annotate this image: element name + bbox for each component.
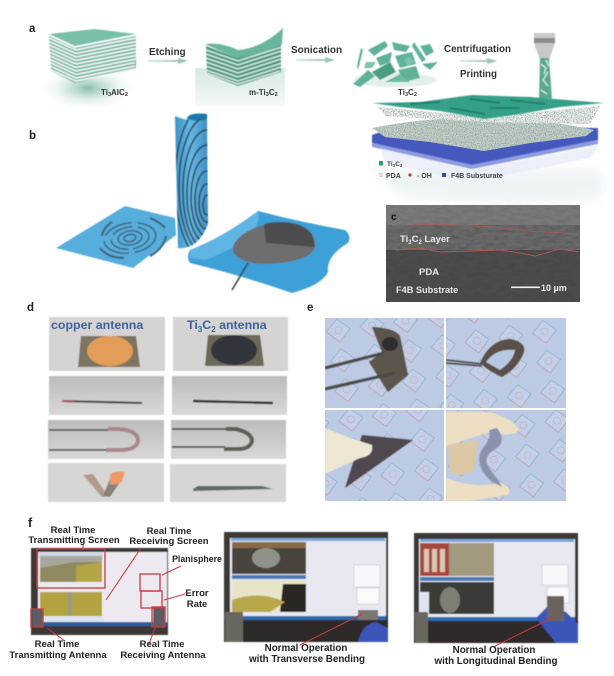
label Ti3C2 Layer: Layer [422, 234, 450, 245]
panel label c: c [391, 212, 397, 223]
legend item Ti3C2 [379, 161, 403, 168]
label Ti3C2 Layer: 3 [408, 240, 412, 246]
callout Real Time Receiving Screen: Real Time [147, 526, 191, 537]
label Ti3AlC2: 3 [108, 92, 111, 98]
red pointer to bent antenna [493, 618, 552, 647]
callout Error Rate: Rate [187, 599, 207, 610]
callout Real Time Receiving Antenna: Receiving Antenna [120, 650, 206, 661]
right sheet with solid antenna [188, 211, 349, 293]
rolled sheet with spiral antenna [174, 112, 209, 249]
legend item OH: - OH [417, 173, 432, 180]
legend item Ti3C2: Ti [387, 161, 393, 168]
label m-Ti3C2: 3 [266, 92, 269, 98]
label Ti3C2: 3 [405, 92, 408, 98]
panel c: SEM cross-section [386, 205, 580, 302]
callout Error Rate: Error [185, 588, 209, 599]
icon: m-Ti3C2 accordion stack [195, 28, 285, 106]
callout Real Time Receiving Screen: Receiving Screen [129, 536, 209, 547]
process label Printing: Printing [460, 69, 497, 80]
legend item Ti3C2: 2 [400, 163, 403, 168]
label m-Ti3C2: C [269, 88, 275, 97]
callout Real Time Transmitting Screen: Transmitting Screen [28, 535, 120, 546]
caption Normal Operation with Longitudinal Bending: with Longitudinal Bending [434, 656, 558, 667]
process label Centrifugation: Centrifugation [444, 44, 511, 55]
panel a: MXene synthesis process [29, 23, 604, 203]
Ti3C2 layer [372, 95, 604, 119]
label Ti3AlC2: 2 [125, 92, 128, 98]
label Ti3C2 Layer: 2 [418, 240, 422, 246]
heading Ti3C2 antenna: 2 [211, 325, 216, 334]
panel label a: a [29, 23, 36, 35]
callout Real Time Receiving Antenna: Real Time [140, 639, 184, 650]
photo: curled film with tweezers [325, 318, 444, 408]
label Ti3C2: Ti [398, 88, 405, 97]
monitor 2: transverse bending [224, 532, 388, 642]
caption Normal Operation with Transverse Bending: Normal Operation [265, 643, 347, 654]
photo: gloved fingers holding film [325, 410, 444, 501]
panel label d: d [27, 302, 34, 314]
legend item PDA: PDA [386, 173, 401, 180]
heading Ti3C2 antenna: Ti [187, 318, 198, 332]
SEM image [386, 205, 580, 302]
monitor 1 desktop [38, 552, 167, 623]
process label Etching: Etching [149, 47, 186, 58]
panel d: copper vs Ti3C2 antenna bending [27, 302, 288, 502]
heading Ti3C2 antenna: C [202, 318, 211, 332]
label Ti3C2 Layer: C [412, 234, 419, 245]
legend item Ti3C2: 3 [393, 163, 396, 168]
label Ti3C2: 2 [414, 92, 417, 98]
label PDA: PDA [419, 267, 439, 278]
callout Real Time Transmitting Screen: Real Time [51, 525, 95, 536]
panel label f: f [28, 516, 33, 530]
layered printed antenna structure [372, 95, 604, 203]
monitor 1 arrows [47, 544, 185, 644]
callout Planisphere: Planisphere [172, 554, 222, 564]
arrow: etching [148, 58, 188, 64]
photo row 3: bent with tweezers [48, 420, 286, 459]
photo row 4: after bending [48, 463, 286, 502]
monitor 1 red highlight boxes [31, 549, 165, 627]
legend item F4B Substurate: F4B Substurate [451, 173, 503, 180]
process label Sonication: Sonication [291, 45, 342, 56]
photo: fingers flexing film [446, 410, 566, 501]
icon: Ti3AlC2 layered stack [36, 29, 140, 112]
heading copper antenna: copper antenna [51, 318, 143, 332]
label Ti3C2 Layer: Ti [400, 234, 408, 245]
callout Real Time Transmitting Antenna: Real Time [35, 639, 79, 650]
red pointer to bent antenna [300, 614, 362, 645]
arrow: sonication [296, 57, 335, 63]
callout Real Time Transmitting Antenna: Transmitting Antenna [9, 650, 107, 661]
label F4B Substrate: F4B Substrate [396, 285, 458, 295]
scale bar [511, 283, 567, 293]
heading Ti3C2 antenna: 3 [198, 325, 203, 334]
panel label e: e [307, 302, 313, 314]
substrate layer: F4B [372, 126, 598, 182]
monitor 1 [31, 548, 168, 635]
photo row 2: flat side views [49, 376, 287, 415]
panel e: flexibility photographs [307, 302, 566, 501]
label Ti3AlC2: Ti [101, 88, 108, 97]
photo: looped film with tweezers [446, 318, 566, 408]
label m-Ti3C2: 2 [275, 92, 278, 98]
legend item Ti3C2: C [395, 161, 400, 168]
label m-Ti3C2: m-Ti [249, 88, 266, 97]
icon: Ti3C2 flakes [353, 41, 438, 87]
monitor 3: longitudinal bending [414, 533, 578, 643]
monitor 1 antennas [32, 609, 43, 627]
panel b: flexible antenna renderings [29, 105, 349, 293]
panel label b: b [29, 130, 36, 142]
PDA layer [372, 117, 594, 151]
photo: copper antenna flat [49, 317, 165, 371]
caption Normal Operation with Longitudinal Bending: Normal Operation [453, 645, 535, 656]
layer shadow background [373, 170, 602, 203]
monitor 1 video windows [39, 553, 104, 622]
icon: printing nozzle with ink [534, 33, 555, 99]
speckled interface [378, 106, 600, 124]
label Ti3C2: C [408, 88, 414, 97]
photo: Ti3C2 antenna flat [173, 317, 288, 371]
legend [379, 161, 503, 180]
left sheet with patterned antenna [56, 206, 176, 268]
caption Normal Operation with Transverse Bending: with Transverse Bending [248, 654, 365, 665]
heading Ti3C2 antenna: antenna [216, 318, 267, 332]
panel f: real-time transmission demonstration [9, 516, 578, 667]
arrow: centrifugation [460, 58, 497, 64]
label Ti3AlC2: AlC [111, 88, 125, 97]
scale bar: 10 µm [541, 283, 567, 293]
